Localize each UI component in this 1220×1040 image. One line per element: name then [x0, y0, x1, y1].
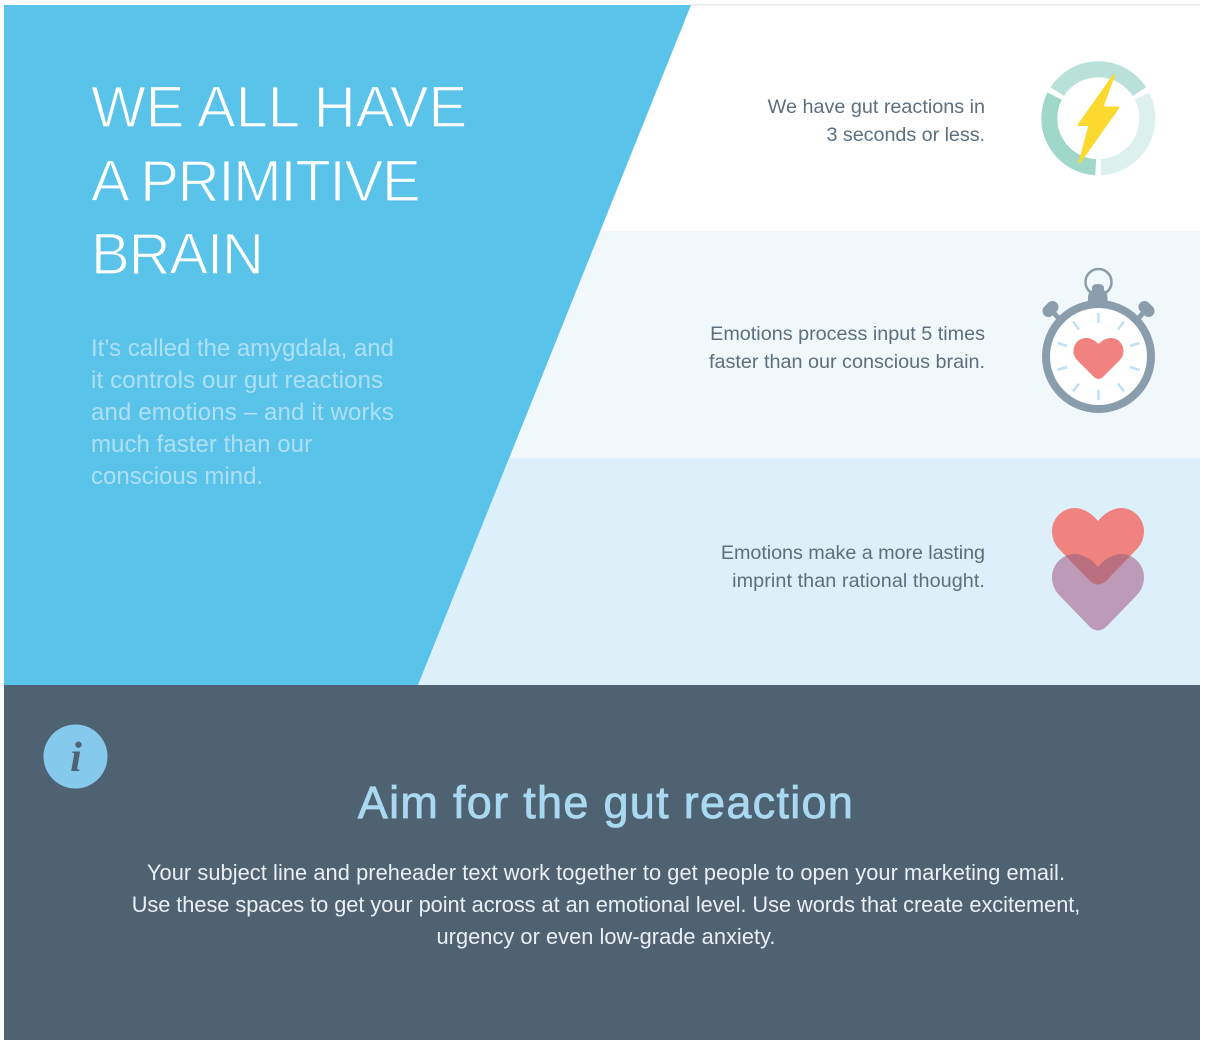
text: emotions process fact: [709, 323, 985, 373]
text: lasting imprint fact: Emotions make a more lasting: [721, 542, 985, 564]
text: gut reactions fact: 3 seconds or less.: [826, 124, 985, 146]
text: emotions process fact: Emotions process input 5 times: [710, 323, 985, 345]
text block: subject line advice: [132, 860, 1080, 949]
panel: gut reaction dark band: [4, 685, 1200, 1040]
text block: subject line advice: Your subject line and preheader text work together to get people to open your marketing email.: [147, 860, 1065, 885]
text block: amygdala description: [91, 335, 394, 490]
text: gut reactions fact: We have gut reactions in: [768, 96, 985, 118]
text: emotions process fact: faster than our conscious brain.: [709, 351, 985, 373]
text: gut reactions fact: [768, 96, 985, 146]
heading: we all have a primitive brain: WE ALL HAVE: [91, 75, 467, 140]
heading: we all have a primitive brain: [91, 75, 467, 287]
text block: subject line advice: urgency or even low-grade anxiety.: [436, 924, 776, 949]
heading: we all have a primitive brain: A PRIMITIVE: [91, 148, 419, 214]
heading: aim for the gut reaction: Aim for the gut reaction: [358, 777, 854, 828]
heading: we all have a primitive brain: BRAIN: [91, 222, 263, 287]
text block: amygdala description: It’s called the amygdala, and: [91, 335, 394, 362]
text block: amygdala description: much faster than our: [91, 431, 312, 458]
text block: amygdala description: and emotions – and it works: [91, 399, 394, 426]
icon: overlapping hearts: [1052, 508, 1144, 630]
text block: amygdala description: it controls our gut reactions: [91, 367, 383, 394]
text block: amygdala description: conscious mind.: [91, 463, 263, 490]
text: lasting imprint fact: [721, 542, 985, 592]
text: lasting imprint fact: imprint than rational thought.: [732, 570, 985, 592]
icon: info badge: i: [70, 735, 82, 781]
text block: subject line advice: Use these spaces to get your point across at an emotional level. Use words that create excitement,: [132, 892, 1080, 917]
